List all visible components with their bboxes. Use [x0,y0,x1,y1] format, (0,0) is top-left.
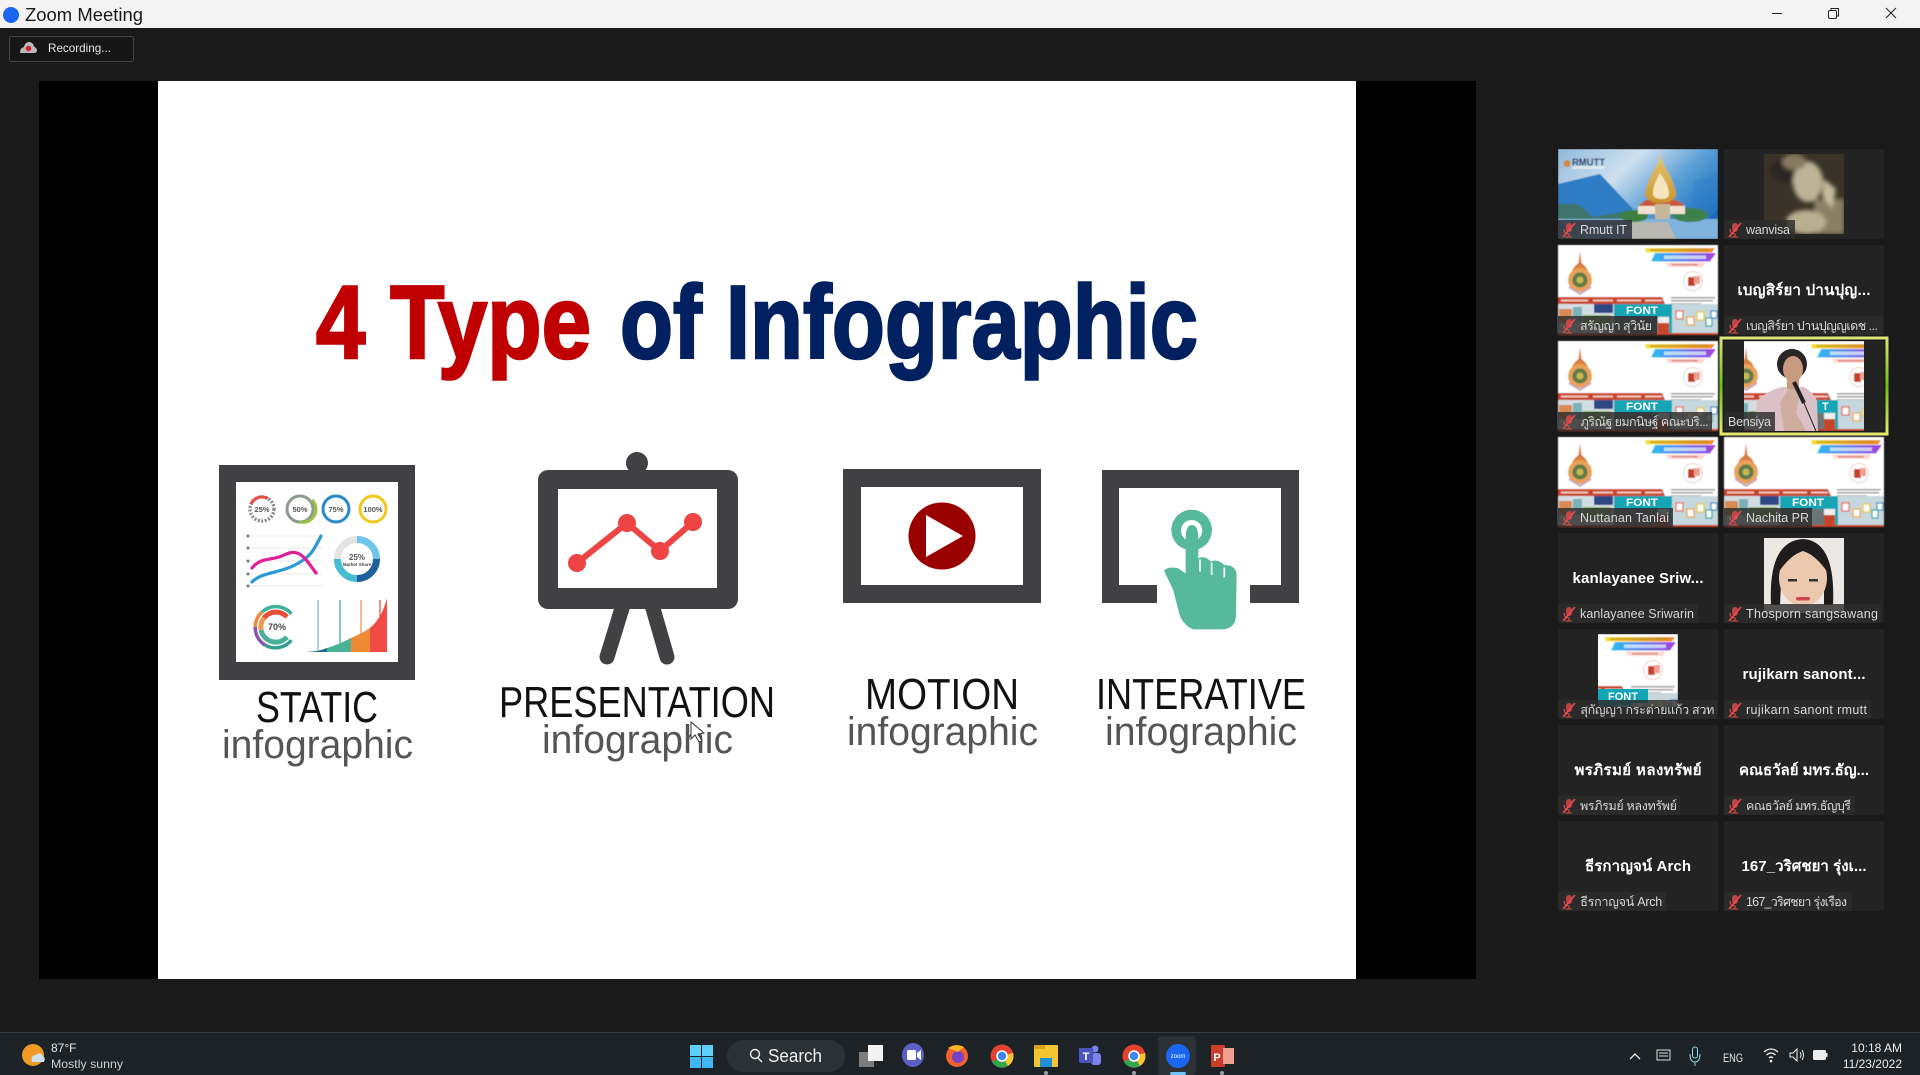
name label: เบญสิร์ยา ปานปุญญเดช ... [1746,319,1878,334]
system tray: 10:18 AM [1851,1041,1902,1055]
weather widget: Mostly sunny [51,1057,123,1071]
tile: คณธวัลย์ มทร.ธัญบุรี [1724,725,1884,815]
name label: ภูริณัฐ ยมกนิษฐ์ คณะบริ... [1581,415,1709,430]
label: MOTION infographic: infographic [847,710,1038,754]
icon: teams: T [1083,1051,1090,1063]
name label: พรภิรมย์ หลงทรัพย์ [1580,799,1677,813]
panel: motion infographic [843,469,1041,754]
tile: 167_วริศชยา รุ่งเรือง: 167_วริศชยา รุ่งเ... [1742,857,1866,876]
recording indicator [10,36,134,62]
name label: rujikarn sanont rmutt [1746,703,1868,717]
label: STATIC infographic: STATIC [256,683,378,732]
tile: Nuttanan Tanlai [1558,437,1718,527]
name label [1724,412,1775,431]
name label [1724,508,1812,527]
label: INTERATIVE infographic: INTERATIVE [1096,670,1306,719]
shared screen letterbox [39,81,1476,979]
tile: สุกัญญา กระต่ายแก้ว [1518,629,1718,724]
name label [1558,892,1666,911]
name label [1724,796,1855,815]
label: PRESENTATION infographic: PRESENTATION [499,678,775,727]
label: PRESENTATION infographic: infographic [542,718,733,762]
system tray: ENG [1723,1053,1743,1065]
icon: windows start [690,1045,713,1068]
icon: meet chat [902,1043,924,1067]
name label [1558,604,1698,623]
title: of Infographic [620,265,1198,381]
mouse cursor [691,722,704,742]
icon: folder [1034,1045,1058,1067]
tile: kanlayanee Sriwarin [1558,533,1718,623]
label: INTERATIVE infographic: infographic [1105,710,1297,754]
icon: poster frame with charts: 75% [328,505,344,514]
taskbar open indicators [1044,1071,1224,1075]
name label [1558,220,1632,239]
tile: พรภิรมย์ หลงทรัพย์ [1558,725,1718,815]
label: MOTION infographic: MOTION [865,670,1019,719]
icon: presentation board on easel [538,452,738,657]
tile: สรัญญา สุวินัย [1558,245,1718,335]
icon: poster frame with charts: 100% [363,505,383,514]
tile: Nuttanan Tanlai: FONT [1626,497,1658,509]
window controls [1772,8,1896,18]
tile: 167_วริศชยา รุ่งเรือง [1724,821,1884,911]
icon: poster frame with charts: 25% [254,505,270,514]
weather widget [22,1041,123,1071]
name label [1558,412,1712,431]
name label: สรัญญา สุวินัย [1580,319,1652,334]
tile: Thosporn sangsawang [1724,533,1884,623]
person speaking [1753,349,1818,431]
title [316,265,1198,381]
icon: chrome [990,1044,1014,1068]
label: STATIC infographic: infographic [222,723,413,767]
icon: poster frame with charts: Market Share [343,562,372,567]
weather widget: 87°F [51,1041,76,1055]
panel: presentation infographic [499,452,775,762]
name label [1724,700,1871,719]
name label: ธีรกาญจน์ Arch [1580,895,1662,909]
name label: Nachita PR [1746,511,1809,525]
name label: 167_วริศชยา รุ่งเรือง [1746,895,1847,910]
name label [1558,316,1657,335]
tile: เบญสิร์ยา ปานปุญญเดช: เบญสิร์ยา ปานปุญ... [1738,281,1870,300]
icon: task view [859,1045,883,1067]
participant gallery [1518,149,1887,911]
name label: wanvisa [1745,223,1790,237]
panel: interactive infographic [1096,470,1306,754]
tile: Bensiya active speaker [1721,338,1887,434]
tile: ภูริณัฐ ยมกนิษฐ์: FONT [1626,401,1658,413]
label: MOTION infographic [847,670,1038,754]
icon: poster frame with charts [219,465,415,680]
name label: Nuttanan Tanlai [1580,511,1669,525]
tile: พรภิรมย์ หลงทรัพย์: พรภิรมย์ หลงทรัพย์ [1574,761,1702,779]
tile: ภูริณัฐ ยมกนิษฐ์ [1558,341,1718,431]
icon: powerpoint [1211,1045,1234,1067]
tile: rujikarn sanont: rujikarn sanont... [1742,666,1866,683]
tile: Rmutt IT [1558,149,1718,239]
tile: Nachita PR: FONT [1792,497,1824,509]
name label: สุกัญญา กระต่ายแก้ว สวท [1580,703,1714,718]
icon: firefox [946,1045,968,1067]
icon: chrome [1122,1044,1146,1068]
name label [1724,316,1883,335]
label: INTERATIVE infographic [1096,670,1306,754]
icon: poster frame with charts: 25% [349,553,365,562]
name label [1724,892,1852,911]
tile: คณธวัลย์ มทร.ธัญบุรี: คณธวัลย์ มทร.ธัญ... [1739,761,1869,779]
label: PRESENTATION infographic [499,678,775,762]
tile: ธีรกาญจน์ Arch: ธีรกาญจน์ Arch [1585,857,1691,875]
name label [1558,508,1673,527]
tile: สุกัญญา กระต่ายแก้ว: FONT [1608,691,1638,703]
window title: Zoom Meeting [25,5,143,25]
search box: Search [768,1046,822,1066]
name label [1558,700,1718,719]
icon: screen with touch hand [1102,470,1299,629]
tile: Rmutt IT: RMUTT [1572,156,1606,168]
recording indicator: Recording... [48,41,111,55]
icon: poster frame with charts: 50% [292,505,308,514]
windows taskbar [0,1032,1920,1075]
tile: wanvisa [1724,149,1884,239]
window title bar [0,0,1920,28]
slide [158,81,1356,979]
icon: powerpoint: P [1213,1052,1221,1064]
tile: Bensiya active speaker: T [1822,401,1829,413]
label: STATIC infographic [222,683,413,767]
tile: เบญสิร์ยา ปานปุญญเดช [1724,245,1884,335]
system tray [1630,1041,1902,1071]
icon: poster frame with charts: 70% [268,622,286,632]
name label: kanlayanee Sriwarin [1580,607,1694,621]
name label [1558,796,1680,815]
system tray: 11/23/2022 [1843,1057,1902,1071]
icon: zoom app [3,7,19,23]
tile: Nachita PR [1724,437,1884,527]
name label: Thosporn sangsawang [1746,607,1878,621]
tile: rujikarn sanont [1724,629,1884,719]
title: 4 Type [316,265,591,381]
name label [1724,220,1795,239]
search box [727,1040,845,1072]
icon: zoom active: zoom [1171,1054,1185,1060]
name label: คณธวัลย์ มทร.ธัญบุรี [1746,799,1851,814]
name label: Bensiya [1728,415,1771,429]
name label [1724,604,1881,623]
tile: ธีรกาญจน์ Arch [1558,821,1718,911]
panel: static infographic [219,465,415,767]
icon: zoom active [1158,1036,1196,1075]
tile: kanlayanee Sriwarin: kanlayanee Sriw... [1572,570,1704,587]
icon: teams [1079,1046,1101,1065]
name label: Rmutt IT [1580,223,1627,237]
icon: video frame with play button [843,469,1041,603]
tile: สรัญญา สุวินัย: FONT [1626,305,1658,317]
active speaker border [1721,338,1887,434]
